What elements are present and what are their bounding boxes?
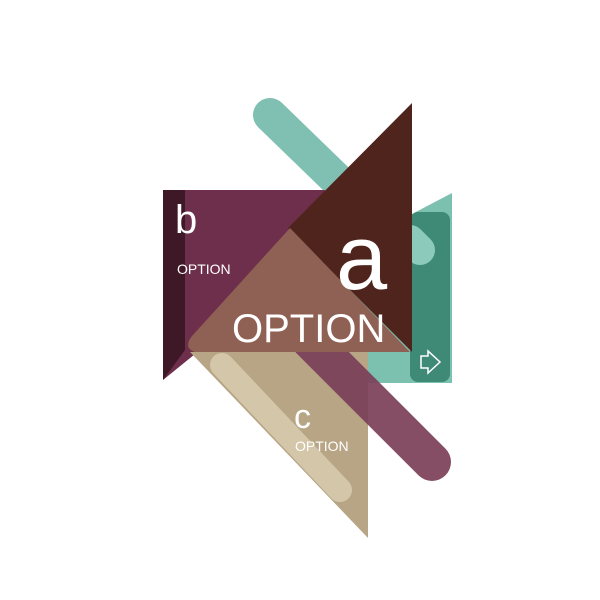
panel: beige triangle c bbox=[190, 352, 368, 538]
teal diagonal bar bbox=[270, 115, 430, 270]
icon: arrow bbox=[421, 351, 440, 373]
text: b option: b bbox=[175, 198, 197, 242]
panel: light brown triangle a bbox=[188, 228, 410, 352]
text: b option: OPTION bbox=[177, 261, 231, 277]
text: a option: OPTION bbox=[232, 307, 385, 351]
text: c option bbox=[294, 398, 349, 454]
text: a option bbox=[232, 207, 388, 351]
text: c option: c bbox=[294, 398, 311, 436]
panel: purple rectangle b bbox=[163, 190, 330, 380]
text: b option bbox=[175, 198, 231, 277]
purple diagonal bar bbox=[310, 340, 432, 462]
panel: dark brown triangle a bbox=[288, 103, 412, 352]
text: a option: a bbox=[336, 207, 388, 309]
panel: teal rectangle bbox=[285, 193, 452, 383]
text: c option: OPTION bbox=[295, 438, 349, 454]
